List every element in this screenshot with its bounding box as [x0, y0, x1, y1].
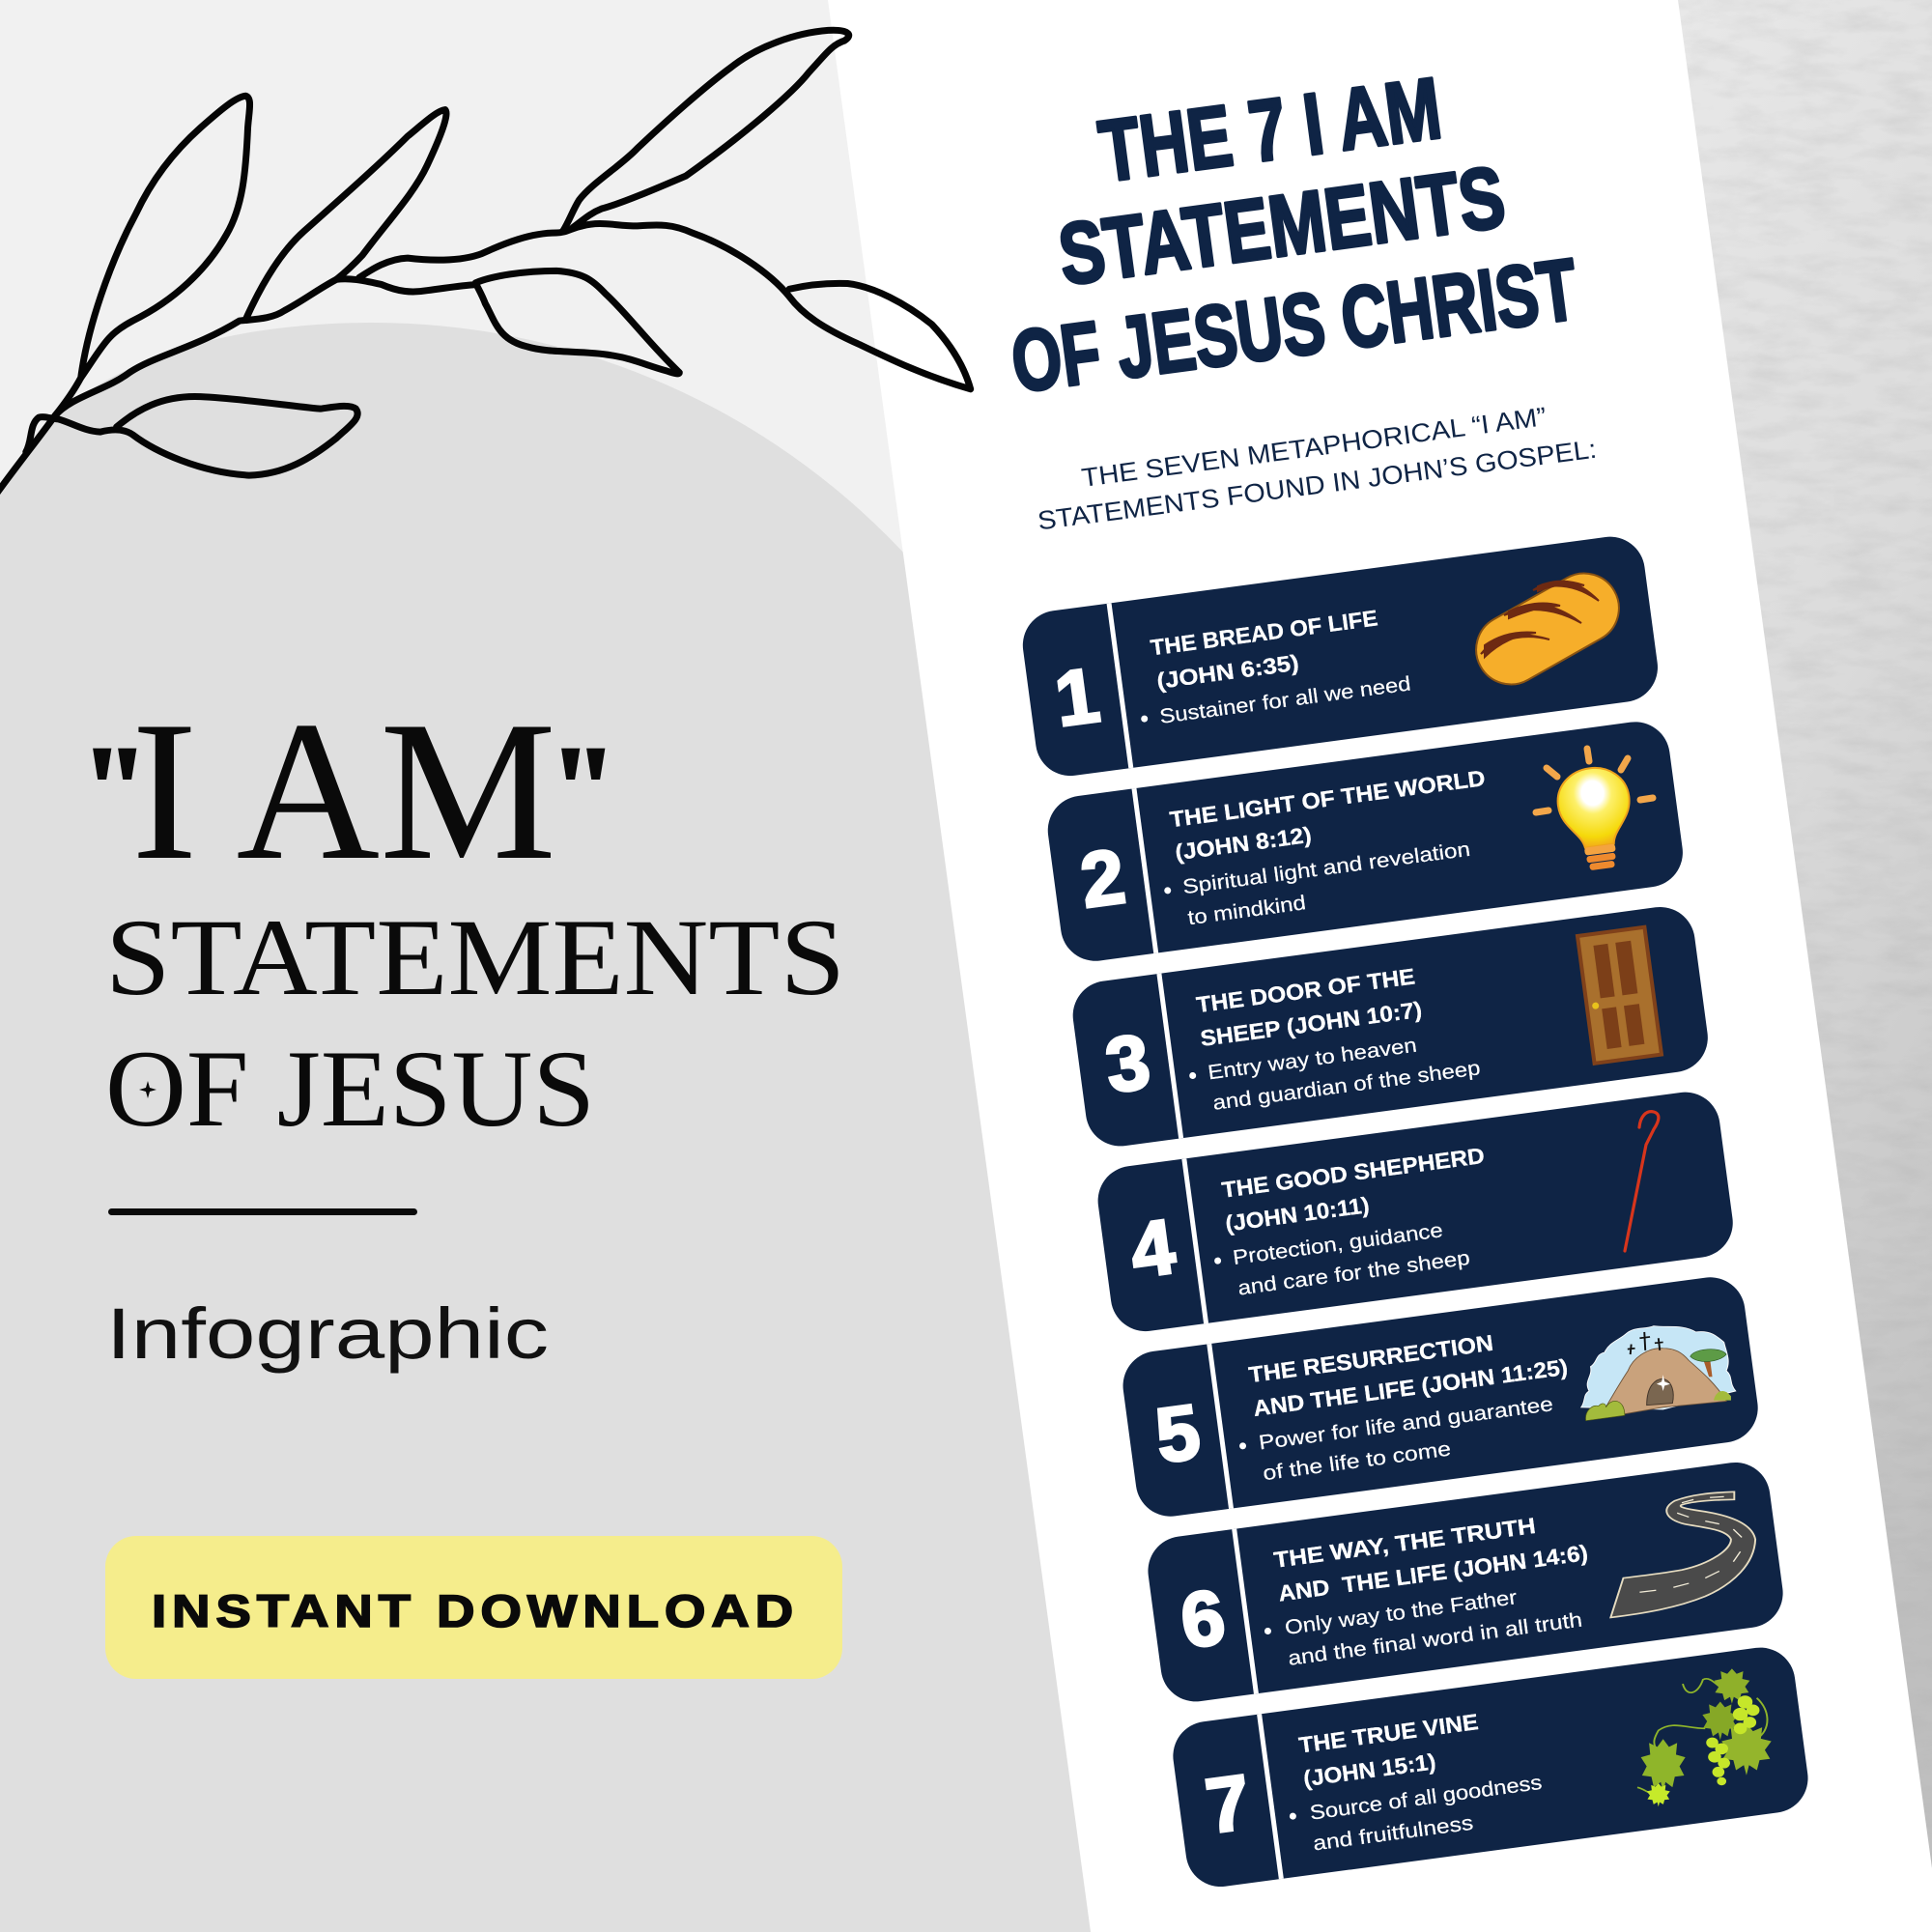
row 6: way, truth, life: THE WAY, THE TRUTH [1272, 1513, 1537, 1573]
row 4: good shepherd: Protection, guidance [1232, 1219, 1444, 1269]
sheet title: THE 7 I AM [1094, 60, 1447, 201]
row 1: bread of life [1018, 532, 1662, 781]
left heading: STATEMENTS: STATEMENTS [105, 897, 845, 1018]
row 5: resurrection and life: AND THE LIFE (JOHN 11:25) [1252, 1354, 1569, 1421]
row 3: door of the sheep [1068, 903, 1712, 1151]
row 6: way, truth, life: AND THE LIFE (JOHN 14:6) [1277, 1540, 1589, 1606]
row 4: good shepherd [1094, 1088, 1737, 1336]
heading divider [108, 1208, 417, 1215]
row 2: light of the world: to mindkind [1186, 892, 1307, 929]
row 5: resurrection and life: 5 [1151, 1388, 1205, 1479]
row 1: bread of life: (JOHN 6:35) [1155, 650, 1300, 694]
button: instant download [105, 1536, 842, 1679]
icon: empty tomb on the hill [1581, 1326, 1736, 1421]
row 5: resurrection and life [1119, 1273, 1762, 1520]
icon: shepherd's staff [1625, 1112, 1659, 1251]
row 7: true vine: and fruitfulness [1312, 1812, 1474, 1856]
row 7: true vine: Source of all goodness [1309, 1772, 1544, 1825]
row 3: door of the sheep: THE DOOR OF THE [1195, 963, 1416, 1017]
grey arch panel [0, 323, 1101, 1932]
sheet title: STATEMENTS [1053, 149, 1511, 304]
row 4: good shepherd: THE GOOD SHEPHERD [1220, 1143, 1486, 1203]
row 6: way, truth, life [1144, 1459, 1787, 1706]
white infographic sheet [828, 0, 1932, 1932]
row 3: door of the sheep: Entry way to heaven [1207, 1035, 1418, 1084]
row 7: true vine: (JOHN 15:1) [1302, 1748, 1437, 1791]
row 1: bread of life: THE BREAD OF LIFE [1149, 605, 1379, 660]
row 5: resurrection and life: THE RESURRECTION [1247, 1330, 1494, 1387]
row 2: light of the world: (JOHN 8:12) [1174, 822, 1313, 865]
row 2: light of the world: 2 [1076, 833, 1129, 923]
sheet subheading [1036, 402, 1598, 535]
row 1: bread of life: Sustainer for all we need [1158, 672, 1412, 728]
icon: winding road [1610, 1492, 1755, 1617]
subtitle: Infographic: Infographic [106, 1293, 549, 1374]
row 4: good shepherd: and care for the sheep [1236, 1247, 1471, 1300]
icon: wooden door [1577, 927, 1662, 1064]
icon: bread loaf [1463, 561, 1632, 696]
row 5: resurrection and life: Power for life and guarantee [1258, 1393, 1554, 1454]
sheet title [1007, 60, 1583, 412]
left heading: OF JESUS: OF JESUS [105, 1029, 595, 1150]
left heading: "I AM": " [81, 723, 148, 856]
icon: light bulb [1536, 749, 1653, 873]
left heading: "I AM": I AM [131, 680, 556, 901]
sheet subheading: THE SEVEN METAPHORICAL “I AM” [1080, 402, 1548, 493]
botanical line drawing [0, 30, 971, 494]
sheet subheading: STATEMENTS FOUND IN JOHN’S GOSPEL: [1036, 435, 1598, 535]
star inside the letter O [139, 1081, 156, 1098]
row 3: door of the sheep: SHEEP (JOHN 10:7) [1199, 997, 1423, 1051]
row 4: good shepherd: 4 [1125, 1203, 1180, 1294]
row 2: light of the world [1043, 718, 1687, 965]
row 6: way, truth, life: and the final word in all truth [1287, 1608, 1583, 1670]
row 3: door of the sheep: 3 [1100, 1018, 1154, 1109]
button: instant download: INSTANT DOWNLOAD [152, 1585, 799, 1636]
left heading: "I AM": " [550, 723, 616, 856]
row 1: bread of life: 1 [1050, 652, 1104, 743]
row 3: door of the sheep: and guardian of the sheep [1211, 1057, 1482, 1115]
row 7: true vine [1169, 1643, 1812, 1890]
row 7: true vine: 7 [1201, 1758, 1255, 1849]
row 4: good shepherd: (JOHN 10:11) [1224, 1192, 1371, 1236]
row 7: true vine: THE TRUE VINE [1297, 1709, 1480, 1758]
sheet title: OF JESUS CHRIST [1007, 242, 1583, 412]
row 6: way, truth, life: Only way to the Father [1284, 1586, 1519, 1639]
row 5: resurrection and life: of the life to come [1262, 1437, 1452, 1485]
statement list [1018, 532, 1812, 1891]
icon: grape vine [1637, 1668, 1772, 1806]
row 6: way, truth, life: 6 [1176, 1574, 1230, 1664]
row 2: light of the world: THE LIGHT OF THE WORLD [1168, 765, 1487, 832]
row 2: light of the world: Spiritual light and revelation [1181, 838, 1471, 898]
